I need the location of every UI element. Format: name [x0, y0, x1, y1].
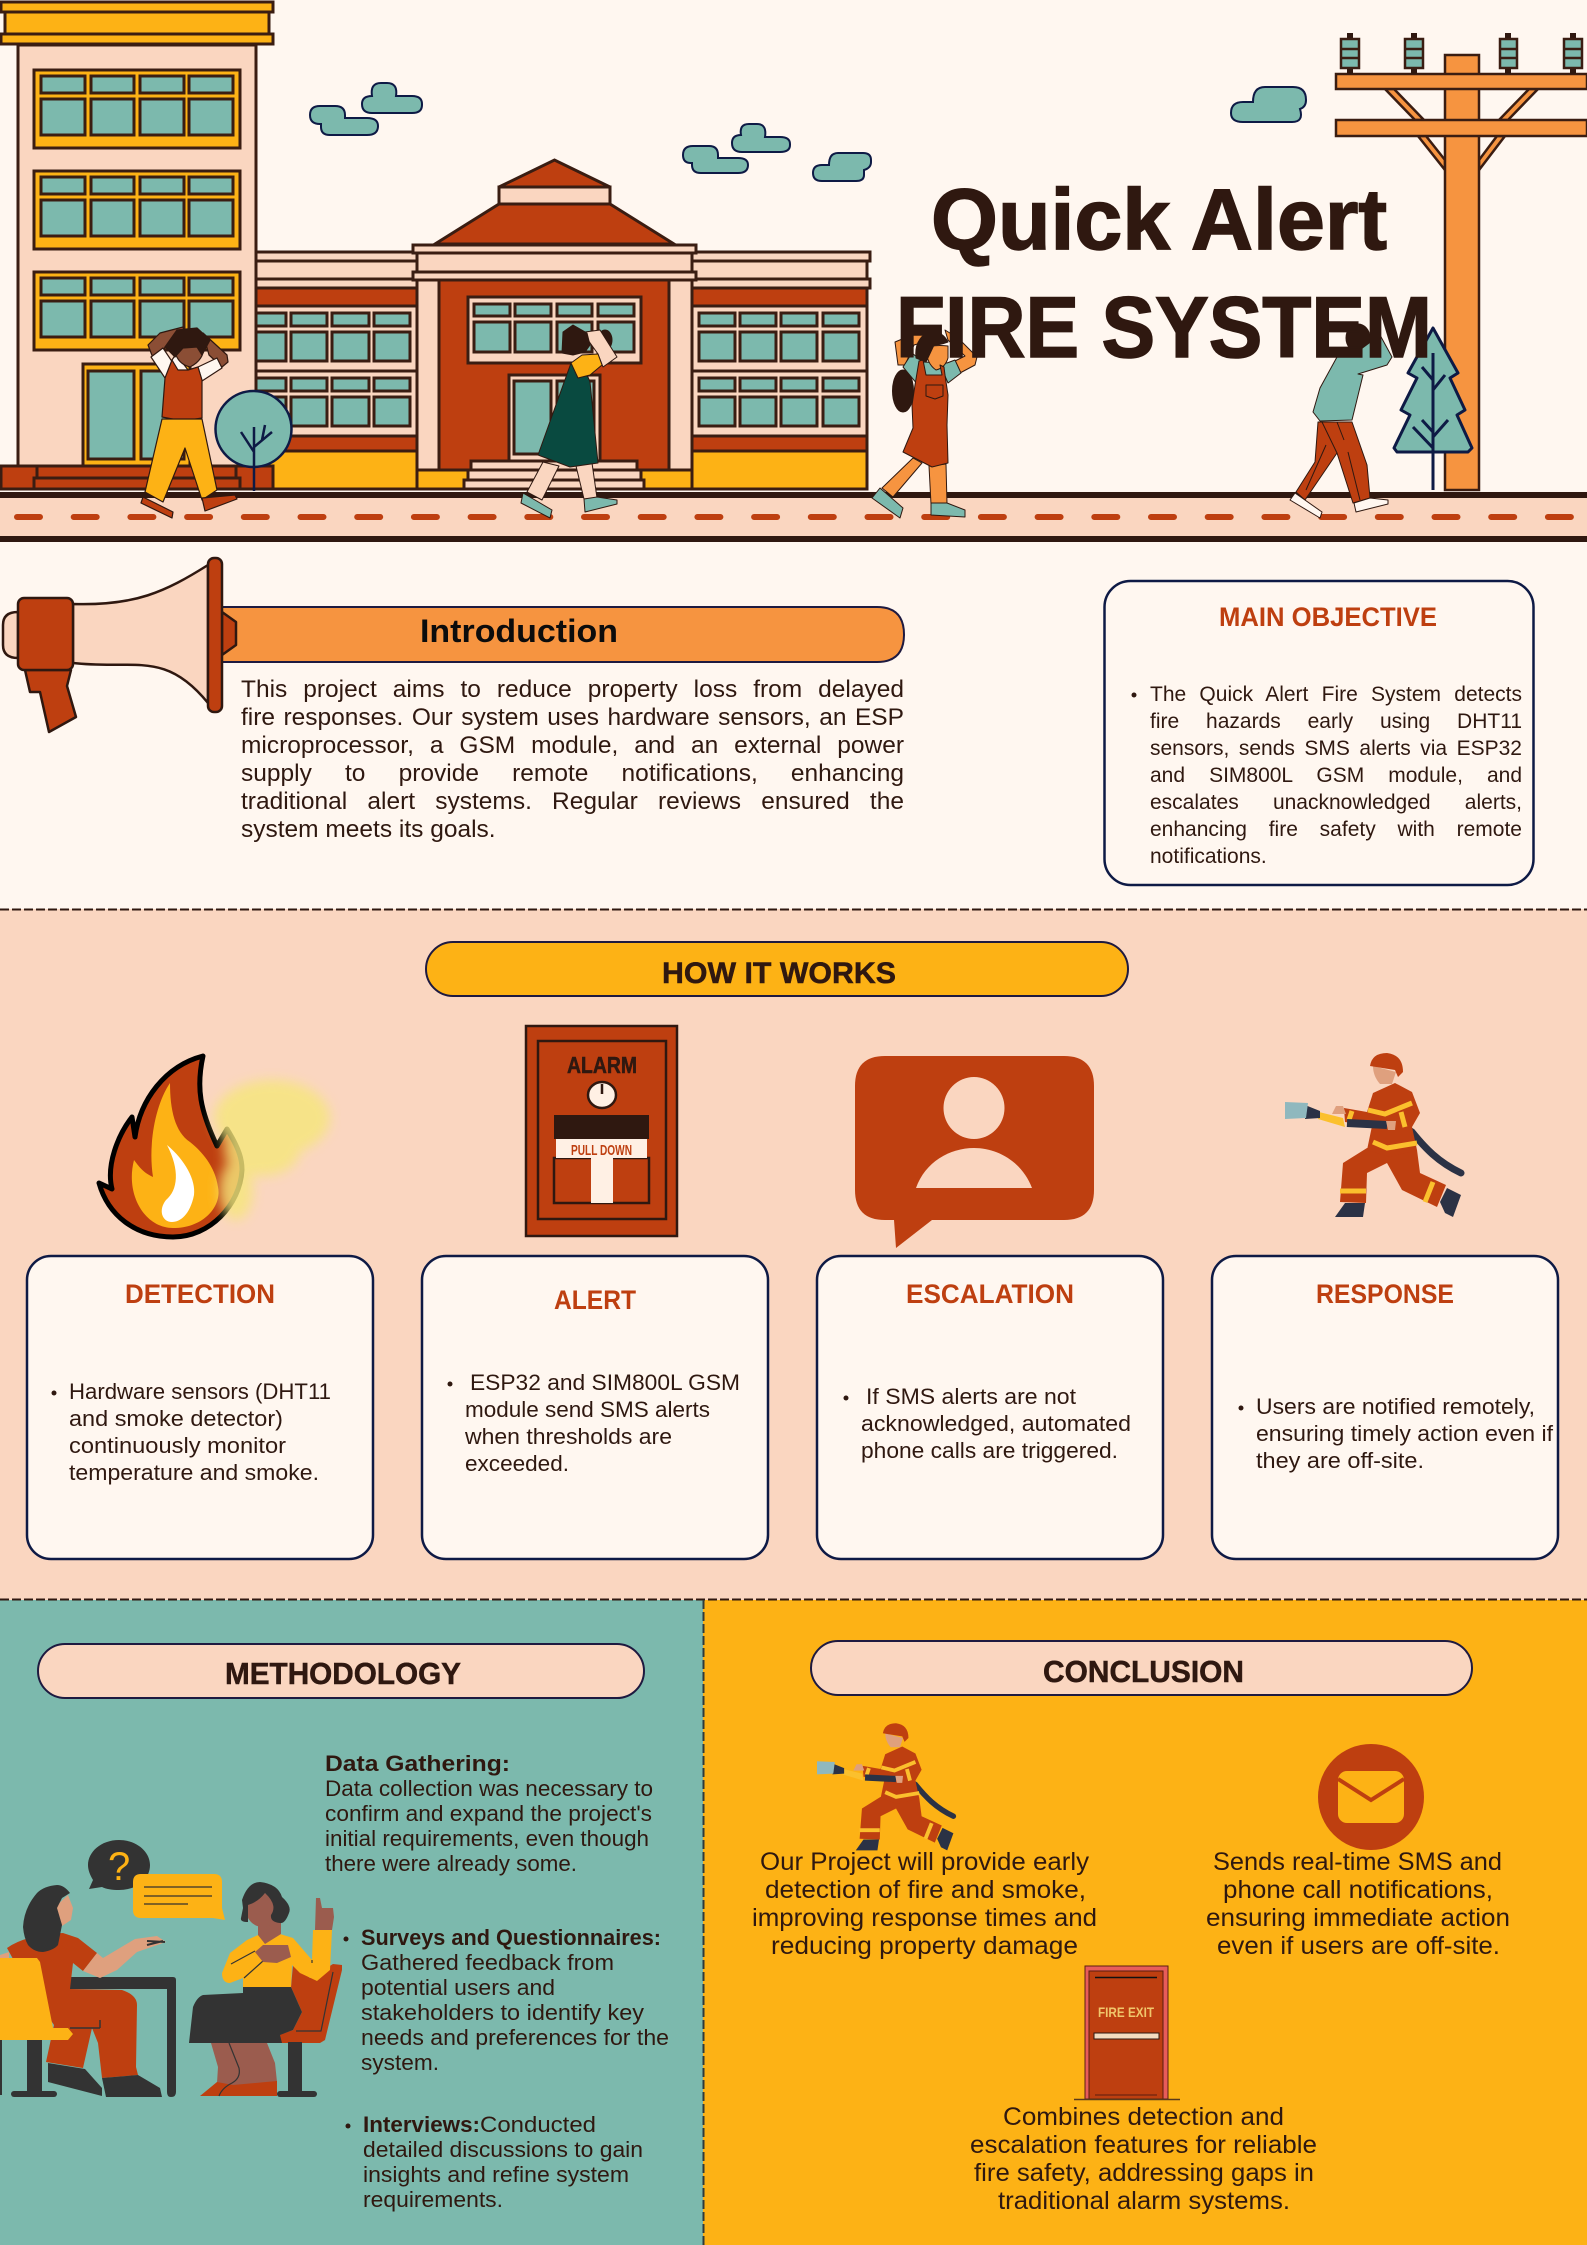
card: response: ensuring timely action even if — [1256, 1421, 1554, 1446]
main objective text: escalates unacknowledged alerts, — [1150, 791, 1522, 814]
illustration: two people talking: ? — [108, 1845, 130, 1889]
text: combined features: traditional alarm systems. — [998, 2187, 1290, 2215]
card: detection: continuously monitor — [69, 1433, 286, 1458]
main objective text: enhancing fire safety with remote — [1150, 818, 1522, 841]
text: combined features: Combines detection and — [1003, 2103, 1284, 2131]
text block: surveys and questionnaires: system. — [361, 2050, 439, 2075]
introduction paragraph: supply to provide remote notifications, enhancing — [241, 760, 904, 787]
methodology heading — [38, 1644, 644, 1698]
how it works heading — [426, 942, 1128, 996]
icon: firefighter — [1285, 1053, 1461, 1217]
card: escalation: acknowledged, automated — [861, 1411, 1131, 1436]
main objective card — [1104, 581, 1534, 885]
text: early detection: Our Project will provide early — [760, 1848, 1090, 1876]
text: real-time notifications: even if users are off-site. — [1217, 1932, 1500, 1960]
person: overalls — [872, 328, 977, 518]
main objective text: fire hazards early using DHT11 — [1150, 710, 1522, 733]
text block: data gathering: initial requirements, even though — [325, 1826, 649, 1851]
introduction paragraph — [241, 676, 904, 843]
road — [0, 492, 1587, 542]
card: escalation — [817, 1256, 1163, 1559]
introduction paragraph: traditional alert systems. Regular reviews ensured the — [241, 788, 904, 815]
card: detection: DETECTION — [125, 1279, 275, 1309]
text block: interviews: Interviews: — [363, 2112, 480, 2137]
main objective card: MAIN OBJECTIVE — [1219, 602, 1437, 632]
text: real-time notifications: ensuring immediate action — [1206, 1904, 1510, 1932]
introduction paragraph: microprocessor, a GSM module, and an external power — [241, 732, 904, 759]
text block: interviews: detailed discussions to gain — [363, 2137, 643, 2162]
icon: alarm pull station — [526, 1026, 677, 1236]
text: real-time notifications: Sends real-time SMS and — [1213, 1848, 1502, 1876]
person: walking, orange top — [141, 327, 237, 518]
text block: interviews — [346, 2112, 643, 2212]
title: Quick Alert — [931, 172, 1387, 268]
person: green dress — [521, 325, 617, 518]
main objective text: and SIM800L GSM module, and — [1150, 764, 1522, 787]
illustration: two people talking — [0, 1840, 342, 2097]
card: response: RESPONSE — [1316, 1279, 1454, 1309]
text: early detection: reducing property damage — [771, 1932, 1078, 1960]
tree: pine — [1394, 328, 1472, 490]
conclusion heading — [811, 1641, 1472, 1695]
text block: interviews: Conducted — [480, 2112, 596, 2137]
text: real-time notifications — [1206, 1848, 1510, 1960]
panel: methodology background — [0, 1600, 703, 2245]
card: alert: ALERT — [554, 1285, 636, 1315]
left wing — [256, 252, 417, 489]
card: detection: temperature and smoke. — [69, 1460, 319, 1485]
text block: surveys and questionnaires: needs and preferences for the — [361, 2025, 669, 2050]
card: detection: and smoke detector) — [69, 1406, 283, 1431]
text: combined features: escalation features for reliable — [970, 2131, 1317, 2159]
icon: email circle — [1318, 1744, 1424, 1850]
text block: data gathering: Data Gathering: — [325, 1751, 510, 1776]
card: escalation: ESCALATION — [906, 1279, 1074, 1309]
icon: alarm pull station: ALARM — [567, 1052, 637, 1078]
card: alert: module send SMS alerts — [465, 1397, 710, 1422]
text block: data gathering: Data collection was necessary to — [325, 1776, 653, 1801]
card: response: Users are notified remotely, — [1256, 1394, 1535, 1419]
text: real-time notifications: phone call notifications, — [1223, 1876, 1493, 1904]
header illustration: school buildings — [1, 2, 870, 489]
icon: flame with smoke — [99, 1056, 330, 1237]
icon: fire exit door: FIRE EXIT — [1098, 2004, 1154, 2020]
text block: interviews: insights and refine system — [363, 2162, 629, 2187]
right wing — [692, 252, 870, 489]
icon: megaphone — [3, 558, 236, 732]
text block: interviews: requirements. — [363, 2187, 503, 2212]
introduction heading bar: Introduction — [420, 613, 618, 649]
tall building — [1, 2, 273, 489]
methodology heading: METHODOLOGY — [225, 1656, 461, 1691]
card: alert: ESP32 and SIM800L GSM — [470, 1370, 740, 1395]
main objective text: notifications. — [1150, 845, 1267, 868]
text block: surveys and questionnaires: Surveys and Questionnaires: — [361, 1925, 661, 1950]
icon: firefighter small — [817, 1723, 953, 1850]
main objective text: The Quick Alert Fire System detects — [1150, 683, 1522, 706]
text block: surveys and questionnaires: potential users and — [361, 1975, 555, 2000]
card: alert — [422, 1256, 768, 1559]
text block: data gathering — [325, 1751, 653, 1876]
conclusion heading: CONCLUSION — [1043, 1654, 1244, 1689]
card: alert: when thresholds are — [464, 1424, 672, 1449]
person: teal top — [1290, 324, 1392, 518]
centre block — [413, 160, 696, 489]
text: early detection: improving response times and — [752, 1904, 1097, 1932]
main objective text — [1150, 683, 1522, 868]
text: early detection: detection of fire and smoke, — [765, 1876, 1086, 1904]
how it works heading: HOW IT WORKS — [662, 957, 896, 990]
main objective text: sensors, sends SMS alerts via ESP32 — [1150, 737, 1522, 760]
introduction paragraph: fire responses. Our system uses hardware sensors, an ESP — [241, 704, 904, 731]
card: response: they are off-site. — [1256, 1448, 1424, 1473]
card: detection: Hardware sensors (DHT11 — [69, 1379, 331, 1404]
title — [896, 172, 1432, 376]
icon: fire exit door — [1074, 1966, 1180, 2100]
introduction paragraph: system meets its goals. — [241, 816, 496, 843]
text: early detection — [752, 1848, 1097, 1960]
utility pole — [1336, 33, 1587, 490]
text block: surveys and questionnaires: stakeholders to identify key — [361, 2000, 644, 2025]
text block: data gathering: confirm and expand the project's — [325, 1801, 652, 1826]
panel: how it works background — [0, 909, 1587, 1600]
card: response — [1212, 1256, 1558, 1559]
text: combined features — [970, 2103, 1317, 2215]
text block: data gathering: there were already some. — [325, 1851, 577, 1876]
introduction paragraph: This project aims to reduce property loss from delayed — [241, 676, 904, 703]
title: FIRE SYSTEM — [896, 280, 1432, 376]
text: combined features: fire safety, addressing gaps in — [974, 2159, 1314, 2187]
text block: surveys and questionnaires — [344, 1925, 669, 2075]
icon: contact speech bubble — [855, 1056, 1094, 1248]
clouds — [310, 83, 1306, 181]
tree: round — [216, 391, 292, 491]
card: alert: exceeded. — [465, 1451, 569, 1476]
icon: alarm pull station: PULL DOWN — [571, 1142, 632, 1159]
text block: surveys and questionnaires: Gathered feedback from — [361, 1950, 614, 1975]
introduction heading bar — [200, 607, 904, 662]
card: detection — [27, 1256, 373, 1559]
panel: conclusion background — [703, 1600, 1587, 2245]
card: escalation: phone calls are triggered. — [861, 1438, 1118, 1463]
card: escalation: If SMS alerts are not — [866, 1384, 1076, 1409]
